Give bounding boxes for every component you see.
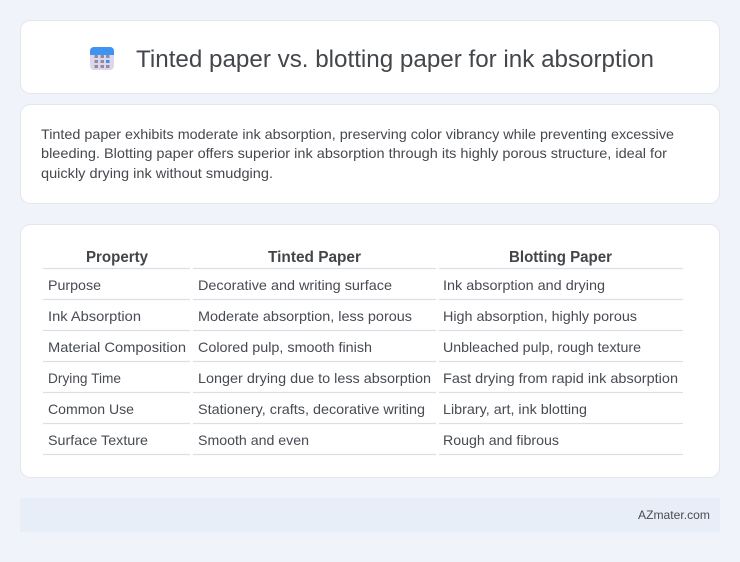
row: purpose	[48, 277, 605, 293]
row: ink absorption: Ink Absorption	[48, 308, 141, 324]
row: material composition: Material Composition	[48, 339, 186, 355]
panel: comparison table	[20, 224, 720, 478]
summary text: Tinted paper exhibits moderate ink absorption, preserving color vibrancy while preventing excessive	[41, 126, 674, 142]
row: drying time	[48, 370, 678, 386]
row: surface texture	[48, 432, 559, 448]
row: surface texture: Rough and fibrous	[443, 432, 559, 448]
title text: Tinted paper vs. blotting paper for ink absorption	[136, 46, 654, 73]
summary text: quickly drying ink without smudging.	[41, 165, 273, 181]
row: common use: Stationery, crafts, decorative writing	[198, 401, 425, 417]
row: drying time: Longer drying due to less absorption	[198, 370, 431, 386]
table header: Property	[86, 249, 148, 266]
row: purpose: Decorative and writing surface	[198, 277, 392, 293]
footer	[20, 498, 720, 532]
summary text	[41, 126, 674, 181]
icon: calendar	[90, 47, 114, 70]
summary text: bleeding. Blotting paper offers superior ink absorption through its highly porous structure, ideal for	[41, 145, 667, 161]
table header	[86, 249, 612, 266]
row: common use	[48, 401, 587, 417]
row: surface texture: Surface Texture	[48, 432, 148, 448]
row: surface texture: Smooth and even	[198, 432, 309, 448]
table header: Tinted Paper	[268, 249, 361, 266]
panel: title	[20, 20, 720, 94]
row: material composition: Colored pulp, smooth finish	[198, 339, 372, 355]
table header: Blotting Paper	[509, 249, 612, 266]
row: common use: Common Use	[48, 401, 134, 417]
row: material composition	[48, 339, 641, 355]
row: ink absorption: Moderate absorption, less porous	[198, 308, 412, 324]
row: drying time: Drying Time	[48, 370, 121, 386]
footer credit: AZmater.com	[638, 508, 710, 522]
row: drying time: Fast drying from rapid ink absorption	[443, 370, 678, 386]
row: purpose: Purpose	[48, 277, 101, 293]
panel: summary	[20, 104, 720, 204]
row: ink absorption: High absorption, highly porous	[443, 308, 637, 324]
row: purpose: Ink absorption and drying	[443, 277, 605, 293]
row: material composition: Unbleached pulp, rough texture	[443, 339, 641, 355]
row: common use: Library, art, ink blotting	[443, 401, 587, 417]
row: ink absorption	[48, 308, 637, 324]
